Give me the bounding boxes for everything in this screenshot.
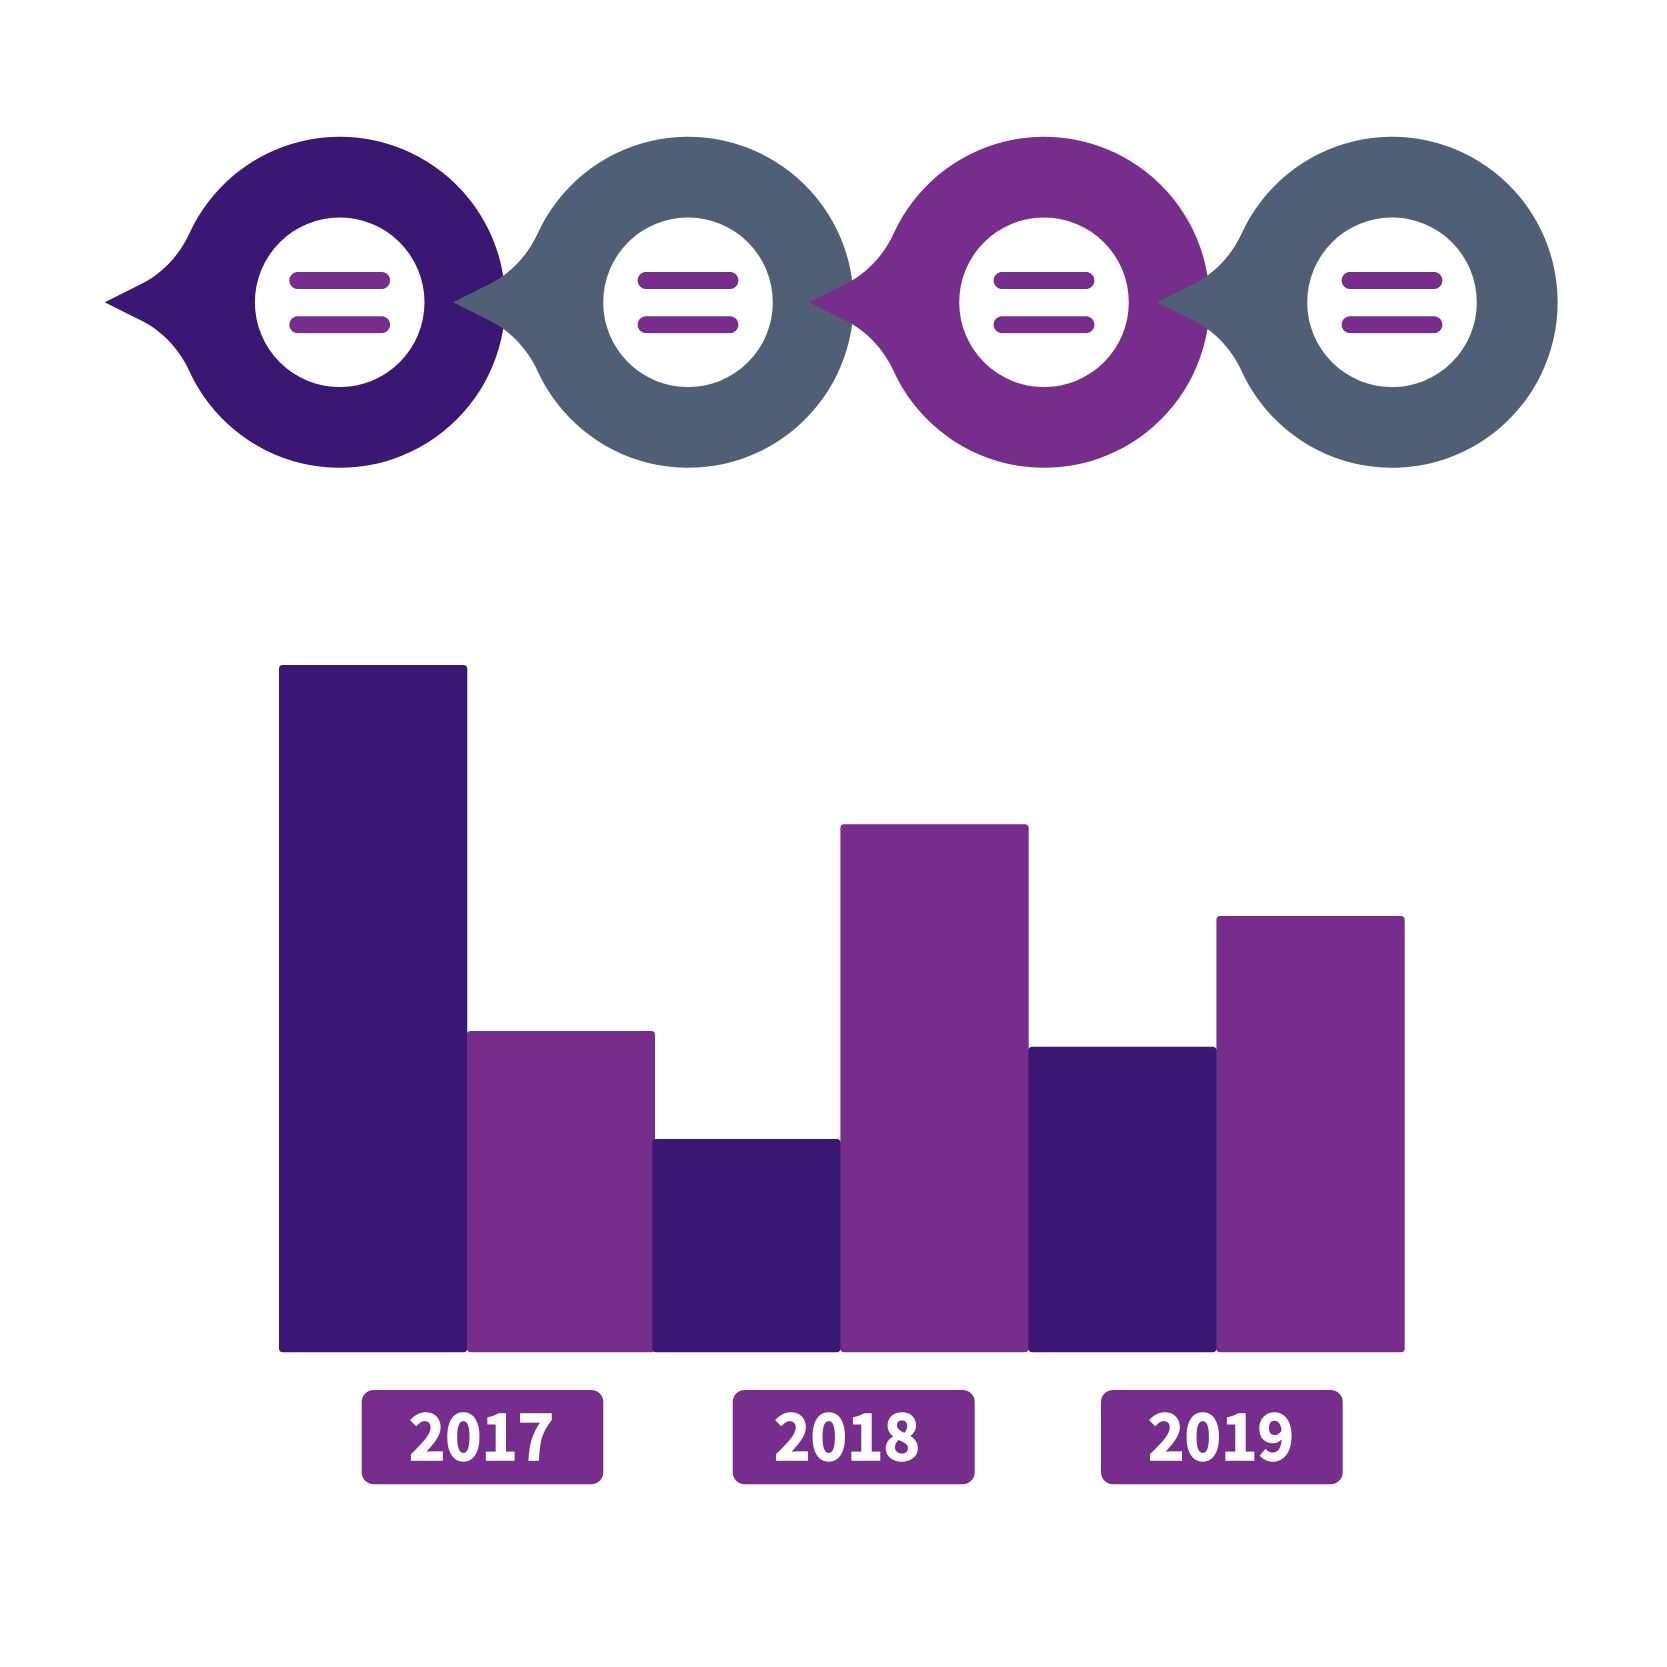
bar: 2018 first bbox=[652, 1139, 840, 1352]
marker 2: slate bubble bbox=[453, 137, 854, 468]
year label 2018 bbox=[733, 1387, 975, 1484]
timeline of four markers bbox=[105, 137, 1558, 468]
bar: 2017 second bbox=[467, 1031, 655, 1352]
year label 2019 bbox=[1101, 1387, 1343, 1484]
year label 2018: 2018 bbox=[774, 1387, 920, 1479]
year label 2017 bbox=[362, 1387, 603, 1484]
bar: 2019 second bbox=[1216, 916, 1405, 1352]
marker 3: purple bubble bbox=[809, 137, 1210, 468]
bar: 2017 first bbox=[279, 665, 467, 1352]
marker 1: dark purple bubble bbox=[105, 137, 505, 468]
bar: 2019 first bbox=[1028, 1047, 1216, 1352]
bar: 2018 second bbox=[840, 824, 1029, 1352]
marker 4: slate bubble bbox=[1157, 137, 1558, 468]
year label 2019: 2019 bbox=[1148, 1387, 1294, 1479]
year label 2017: 2017 bbox=[409, 1387, 554, 1479]
bar chart bbox=[279, 665, 1405, 1352]
